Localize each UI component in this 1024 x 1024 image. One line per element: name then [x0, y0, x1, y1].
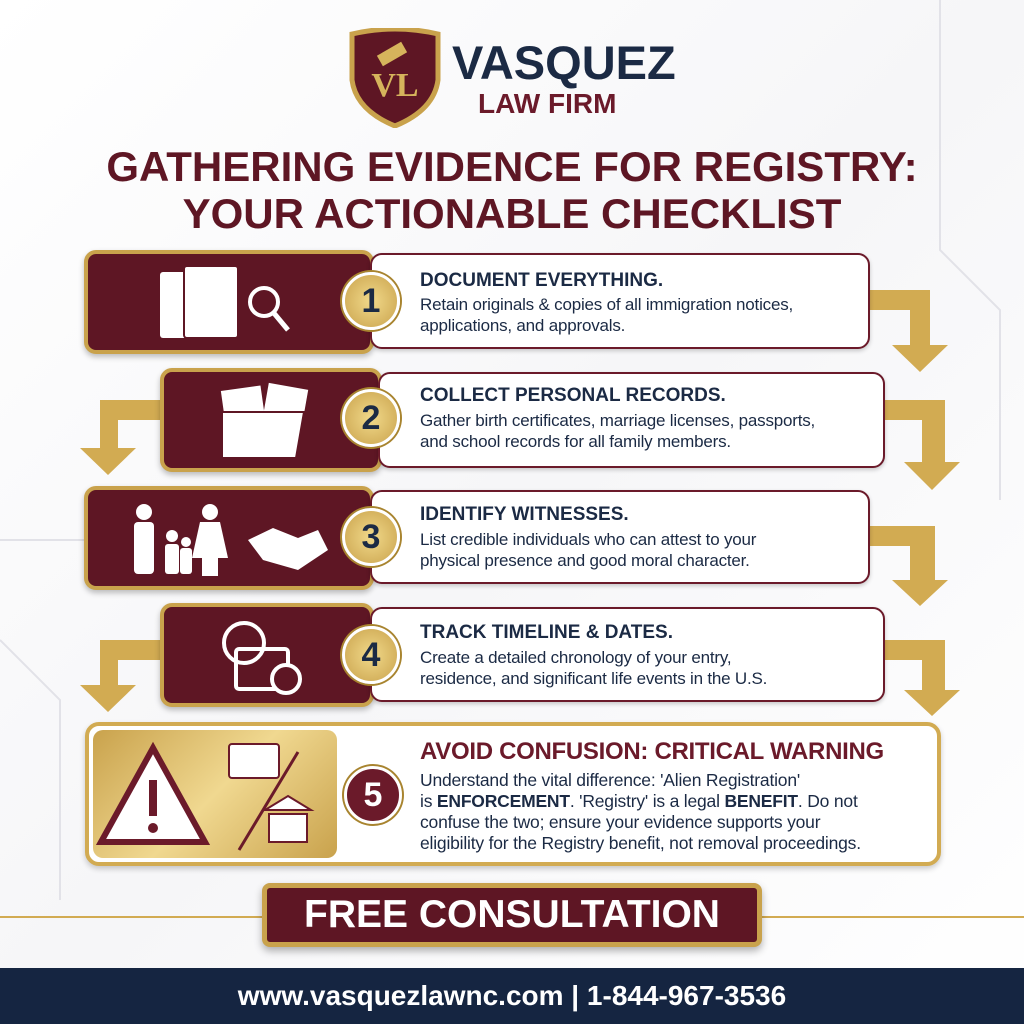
panel: icon folder — [160, 368, 382, 472]
step 2: Gather birth certificates, marriage licenses, passports, — [420, 411, 815, 430]
panel: icon family — [84, 486, 374, 590]
step 5: warning: 5 — [364, 776, 382, 814]
step 3 — [81, 486, 872, 596]
title — [106, 143, 918, 237]
button: free consultation — [262, 883, 762, 947]
panel: icon documents — [84, 250, 374, 354]
footer — [0, 968, 1024, 1024]
logo text: VASQUEZ — [452, 36, 676, 89]
step 3: List credible individuals who can attest to your — [420, 530, 756, 549]
step 1: Retain originals & copies of all immigration notices, — [420, 295, 793, 314]
step 5: warning: Understand the vital difference: 'Alien Registration' — [420, 770, 800, 790]
step 1: 1 — [362, 282, 380, 320]
step 4: residence, and significant life events in the U.S. — [420, 669, 767, 688]
step 3: IDENTIFY WITNESSES. — [420, 504, 629, 525]
title: YOUR ACTIONABLE CHECKLIST — [183, 190, 841, 237]
step 5: warning — [85, 722, 941, 866]
panel: warning icons — [93, 730, 337, 858]
button: free consultation: FREE CONSULTATION — [304, 893, 720, 936]
step 5: warning: confuse the two; ensure your evidence supports your — [420, 812, 820, 832]
step 2: COLLECT PERSONAL RECORDS. — [420, 385, 726, 406]
step 4: 4 — [362, 636, 380, 674]
step 2: and school records for all family members. — [420, 432, 731, 451]
icon: shield — [350, 28, 440, 128]
step 2 — [157, 368, 887, 478]
divider line — [0, 916, 1024, 918]
logo: LAW FIRM — [478, 88, 616, 119]
step 1: applications, and approvals. — [420, 316, 625, 335]
step 2: 2 — [362, 399, 380, 437]
step 5: warning: is ENFORCEMENT. 'Registry' is a legal BENEFIT. Do not — [420, 791, 858, 811]
step 5: warning: AVOID CONFUSION: CRITICAL WARNING — [420, 738, 884, 765]
icon: shield: VL — [371, 67, 419, 104]
step 1 — [81, 250, 872, 360]
logo — [350, 28, 676, 128]
step 5: warning: eligibility for the Registry benefit, not removal proceedings. — [420, 833, 861, 853]
step 4: TRACK TIMELINE & DATES. — [420, 622, 673, 643]
step 4: Create a detailed chronology of your entry, — [420, 648, 731, 667]
title: GATHERING EVIDENCE FOR REGISTRY: — [106, 143, 918, 190]
panel: icon clock calendar — [160, 603, 374, 707]
step 1: DOCUMENT EVERYTHING. — [420, 270, 663, 291]
step 3: 3 — [362, 518, 380, 556]
step 4 — [157, 603, 887, 713]
footer: www.vasquezlawnc.com | 1-844-967-3536 — [238, 980, 786, 1011]
step 3: physical presence and good moral character. — [420, 551, 750, 570]
